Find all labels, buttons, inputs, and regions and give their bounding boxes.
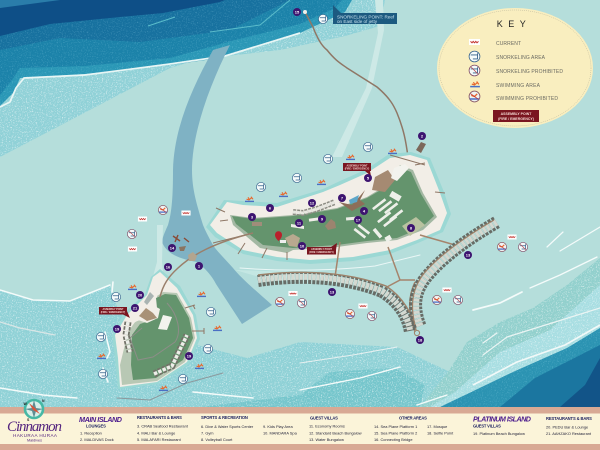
reception sand <box>122 302 160 328</box>
restaurants and bars: RESTAURANTS & BARS <box>137 415 182 420</box>
guest villas <box>309 416 362 442</box>
lagoon halo <box>112 269 200 389</box>
vegetation <box>120 292 195 385</box>
restaurant building <box>139 308 157 321</box>
sea plane platform <box>179 246 186 251</box>
key: swimming prohibited: SWIMMING PROHIBITED <box>496 96 558 102</box>
assembly point sign: main island north: ASSEMBLY POINT <box>346 164 368 168</box>
key: snorkeling area <box>469 51 546 62</box>
platinum island guest villas: 19. Platinum Beach Bungalow <box>473 431 525 436</box>
snorkeling area markers <box>96 14 373 384</box>
main island lounges: MAIN ISLAND <box>79 415 122 424</box>
numbered map markers: 3 <box>251 214 254 219</box>
restaurants and bars: 5. MALAFARI Restaurant <box>137 437 182 442</box>
snorkeling point callout <box>333 5 397 24</box>
selfie point ring <box>414 330 420 336</box>
beach <box>210 155 447 260</box>
platinum island guest villas: PLATINUM ISLAND <box>473 414 531 424</box>
pavilion on bridge <box>188 252 197 261</box>
numbered map markers: 5 <box>367 175 370 180</box>
numbered map markers: 9 <box>321 216 324 221</box>
key: snorkeling prohibited: SNORKELING PROHIBITED <box>496 69 563 75</box>
main island lounges: 1. Reception <box>80 430 102 436</box>
sea planes <box>173 235 189 242</box>
guest villas: 11. Economy Rooms <box>309 424 345 428</box>
key: assembly point: ASSEMBLY POINT <box>501 112 532 116</box>
vegetation <box>230 165 437 253</box>
numbered map markers: 19 <box>187 353 192 358</box>
platinum island restaurants and bars: 20. PEDU Bar & Lounge <box>546 424 588 430</box>
numbered map markers: 10 <box>300 243 305 248</box>
platinum island restaurants and bars <box>546 416 592 436</box>
other areas: 15. Sea Plane Platform 2 <box>374 430 417 436</box>
numbered map markers: 8 <box>410 225 413 230</box>
numbered map markers: 20 <box>138 292 143 297</box>
numbered map markers: 13 <box>466 252 471 257</box>
numbered map markers: 11 <box>297 220 302 225</box>
other areas: 17. Mosque <box>427 424 447 429</box>
snorkeling point callout: on East side of jetty <box>337 19 378 24</box>
garden path <box>130 303 178 360</box>
assembly point sign: main island south: (FIRE / EMERGENCY) <box>309 251 334 254</box>
bottom left shallow reef <box>0 285 450 407</box>
assembly point sign: platinum island: ASSEMBLY POINT <box>102 308 124 311</box>
numbered map markers: 1 <box>198 263 201 268</box>
connecting piers <box>335 235 455 332</box>
numbered map markers: 7 <box>341 195 344 200</box>
key: swimming area: SWIMMING AREA <box>496 83 541 89</box>
current markers <box>128 210 517 308</box>
compass rose: S <box>27 418 30 422</box>
north jetty <box>305 12 408 157</box>
numbered map markers: 4 <box>363 208 366 213</box>
platinum island guest villas: GUEST VILLAS <box>473 424 501 428</box>
key: assembly point <box>493 110 539 122</box>
swimming prohibited markers <box>158 205 507 319</box>
key: assembly point: (FIRE / EMERGENCY) <box>498 117 534 121</box>
assembly point sign: main island north: (FIRE / EMERGENCY) <box>345 168 369 170</box>
west water villa arc <box>258 272 416 332</box>
beach <box>115 272 197 387</box>
guest villas: GUEST VILLAS <box>310 416 338 420</box>
restaurants and bars: 4. MALI Bar & Lounge <box>137 430 175 436</box>
key panel <box>437 8 593 128</box>
platinum island restaurants and bars: RESTAURANTS & BARS <box>546 416 592 421</box>
snorkeling point callout: SNORKELING POINT: Reef <box>337 14 395 20</box>
east water villa arc <box>412 220 497 326</box>
guest villas: 12. Standard Beach Bungalow <box>309 430 362 436</box>
logo: HAKURAA HURAA <box>13 433 58 438</box>
sports and recreation: 7. Gym <box>201 430 214 436</box>
current channel <box>162 45 272 324</box>
platinum island <box>112 269 204 389</box>
sports and recreation <box>201 415 298 442</box>
other areas: 16. Connecting Bridge <box>374 437 412 442</box>
numbered map markers: 18 <box>418 337 423 342</box>
logo: Cinnamon <box>7 419 62 435</box>
logo <box>7 419 62 442</box>
beach villas <box>293 202 335 213</box>
assembly point sign: main island south: ASSEMBLY POINT <box>311 248 333 251</box>
small jetties <box>213 155 445 260</box>
compass rose <box>24 399 45 422</box>
other areas: 18. Selfie Point <box>427 430 454 436</box>
dock building at north end <box>416 142 426 153</box>
compass rose: W <box>24 402 28 406</box>
numbered map markers: 13 <box>330 289 335 294</box>
key: swimming area <box>470 82 541 89</box>
numbered map markers: 19 <box>115 326 120 331</box>
key: snorkeling prohibited <box>469 65 563 76</box>
numbered map markers: 15 <box>295 9 300 14</box>
island piers <box>185 305 204 334</box>
lagoon halo <box>206 152 451 264</box>
other areas <box>374 416 454 442</box>
key: current <box>469 39 521 47</box>
assembly point sign: main island north <box>343 163 371 176</box>
restaurants and bars: 3. CRAB Seafood Restaurant <box>137 424 189 428</box>
south beach villas <box>154 335 187 374</box>
main island lounges: LOUNGES <box>86 424 106 428</box>
platinum island restaurants and bars: 21. AAHZAKO Restaurant <box>546 431 592 436</box>
key title: KEY <box>497 19 531 29</box>
logo: Maldives <box>27 438 42 442</box>
bungalow block <box>158 315 172 330</box>
key: current: CURRENT <box>496 41 521 47</box>
sandbar streaks <box>152 0 384 284</box>
restaurants and bars <box>137 415 189 442</box>
bottom right reef and deep ocean <box>420 258 600 407</box>
west beach villas <box>126 322 130 352</box>
swimming area markers <box>97 149 397 391</box>
other areas: OTHER AREAS <box>399 416 427 420</box>
main island lounges: 2. MALDIVAS Dock <box>80 437 114 442</box>
pool deck <box>144 292 154 305</box>
foam lines <box>0 227 600 405</box>
sports and recreation: SPORTS & RECREATION <box>201 415 248 420</box>
assembly point sign: platinum island <box>99 307 130 318</box>
other areas: 14. Sea Plane Platform 1 <box>374 424 417 429</box>
sports and recreation: 8. Volleyball Court <box>201 437 233 442</box>
snorkeling prohibited markers <box>127 229 528 321</box>
key: swimming prohibited <box>469 91 558 102</box>
numbered map markers: 2 <box>421 133 424 138</box>
numbered map markers: 14 <box>170 245 175 250</box>
platinum island guest villas <box>473 414 531 436</box>
sports and recreation: 10. MANDARA Spa <box>263 430 298 436</box>
guest villas: 13. Water Bungalow <box>309 437 344 442</box>
bridge between islands <box>160 233 253 297</box>
numbered map markers: 6 <box>269 205 272 210</box>
numbered map markers: 16 <box>166 264 171 269</box>
numbered map markers: 17 <box>356 217 361 222</box>
sports and recreation: 9. Kids Play Area <box>263 424 293 429</box>
assembly point sign: main island south <box>307 243 337 254</box>
numbered map markers: 12 <box>310 200 315 205</box>
key: snorkeling area: SNORKELING AREA <box>496 55 546 61</box>
footer legend <box>0 399 600 450</box>
numbered map markers: 21 <box>133 305 138 310</box>
compass rose: N <box>42 399 45 403</box>
sports and recreation: 6. Dive & Water Sports Center <box>201 424 254 429</box>
assembly point sign: platinum island: (FIRE / EMERGENCY) <box>101 311 125 314</box>
numbered map markers <box>113 8 472 360</box>
red location pin <box>275 231 282 241</box>
main island lounges <box>79 415 122 442</box>
main island buildings <box>252 164 425 247</box>
main island <box>206 152 451 264</box>
top left deep ocean <box>0 0 385 157</box>
sea plane platform at jetty end <box>303 10 307 14</box>
